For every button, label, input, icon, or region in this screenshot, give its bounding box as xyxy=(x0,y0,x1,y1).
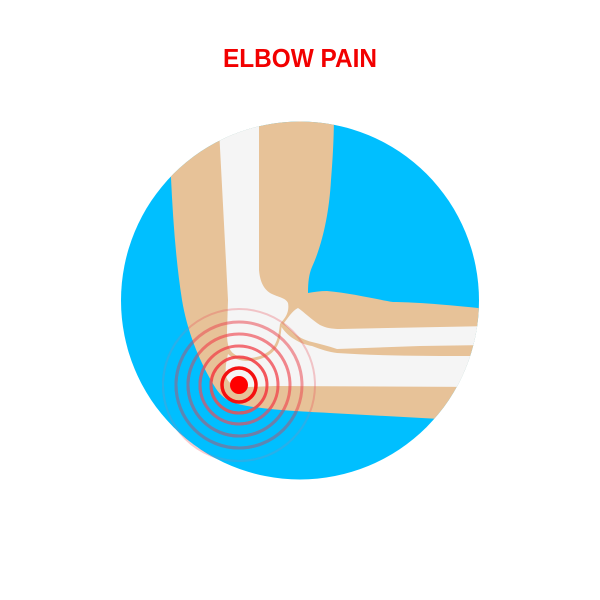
center dot xyxy=(230,376,248,394)
forearm lower bone (ulna) xyxy=(226,327,490,387)
ring 4 xyxy=(188,334,290,436)
blue circle background xyxy=(121,122,479,480)
pain target rings xyxy=(163,309,315,461)
ring 3 xyxy=(200,346,278,424)
ring 1 xyxy=(222,368,256,402)
forearm upper bone (radius) xyxy=(284,308,490,349)
pain rings over blue background xyxy=(162,327,311,462)
arm illustration xyxy=(170,122,479,419)
upper arm bone (humerus) xyxy=(218,110,288,358)
ring 5 xyxy=(176,322,302,448)
title: ELBOW PAIN xyxy=(223,43,377,73)
ring 2 xyxy=(211,357,267,413)
ring 6 xyxy=(163,309,315,461)
arm skin xyxy=(170,122,479,419)
elbow pain infographic xyxy=(121,48,479,480)
